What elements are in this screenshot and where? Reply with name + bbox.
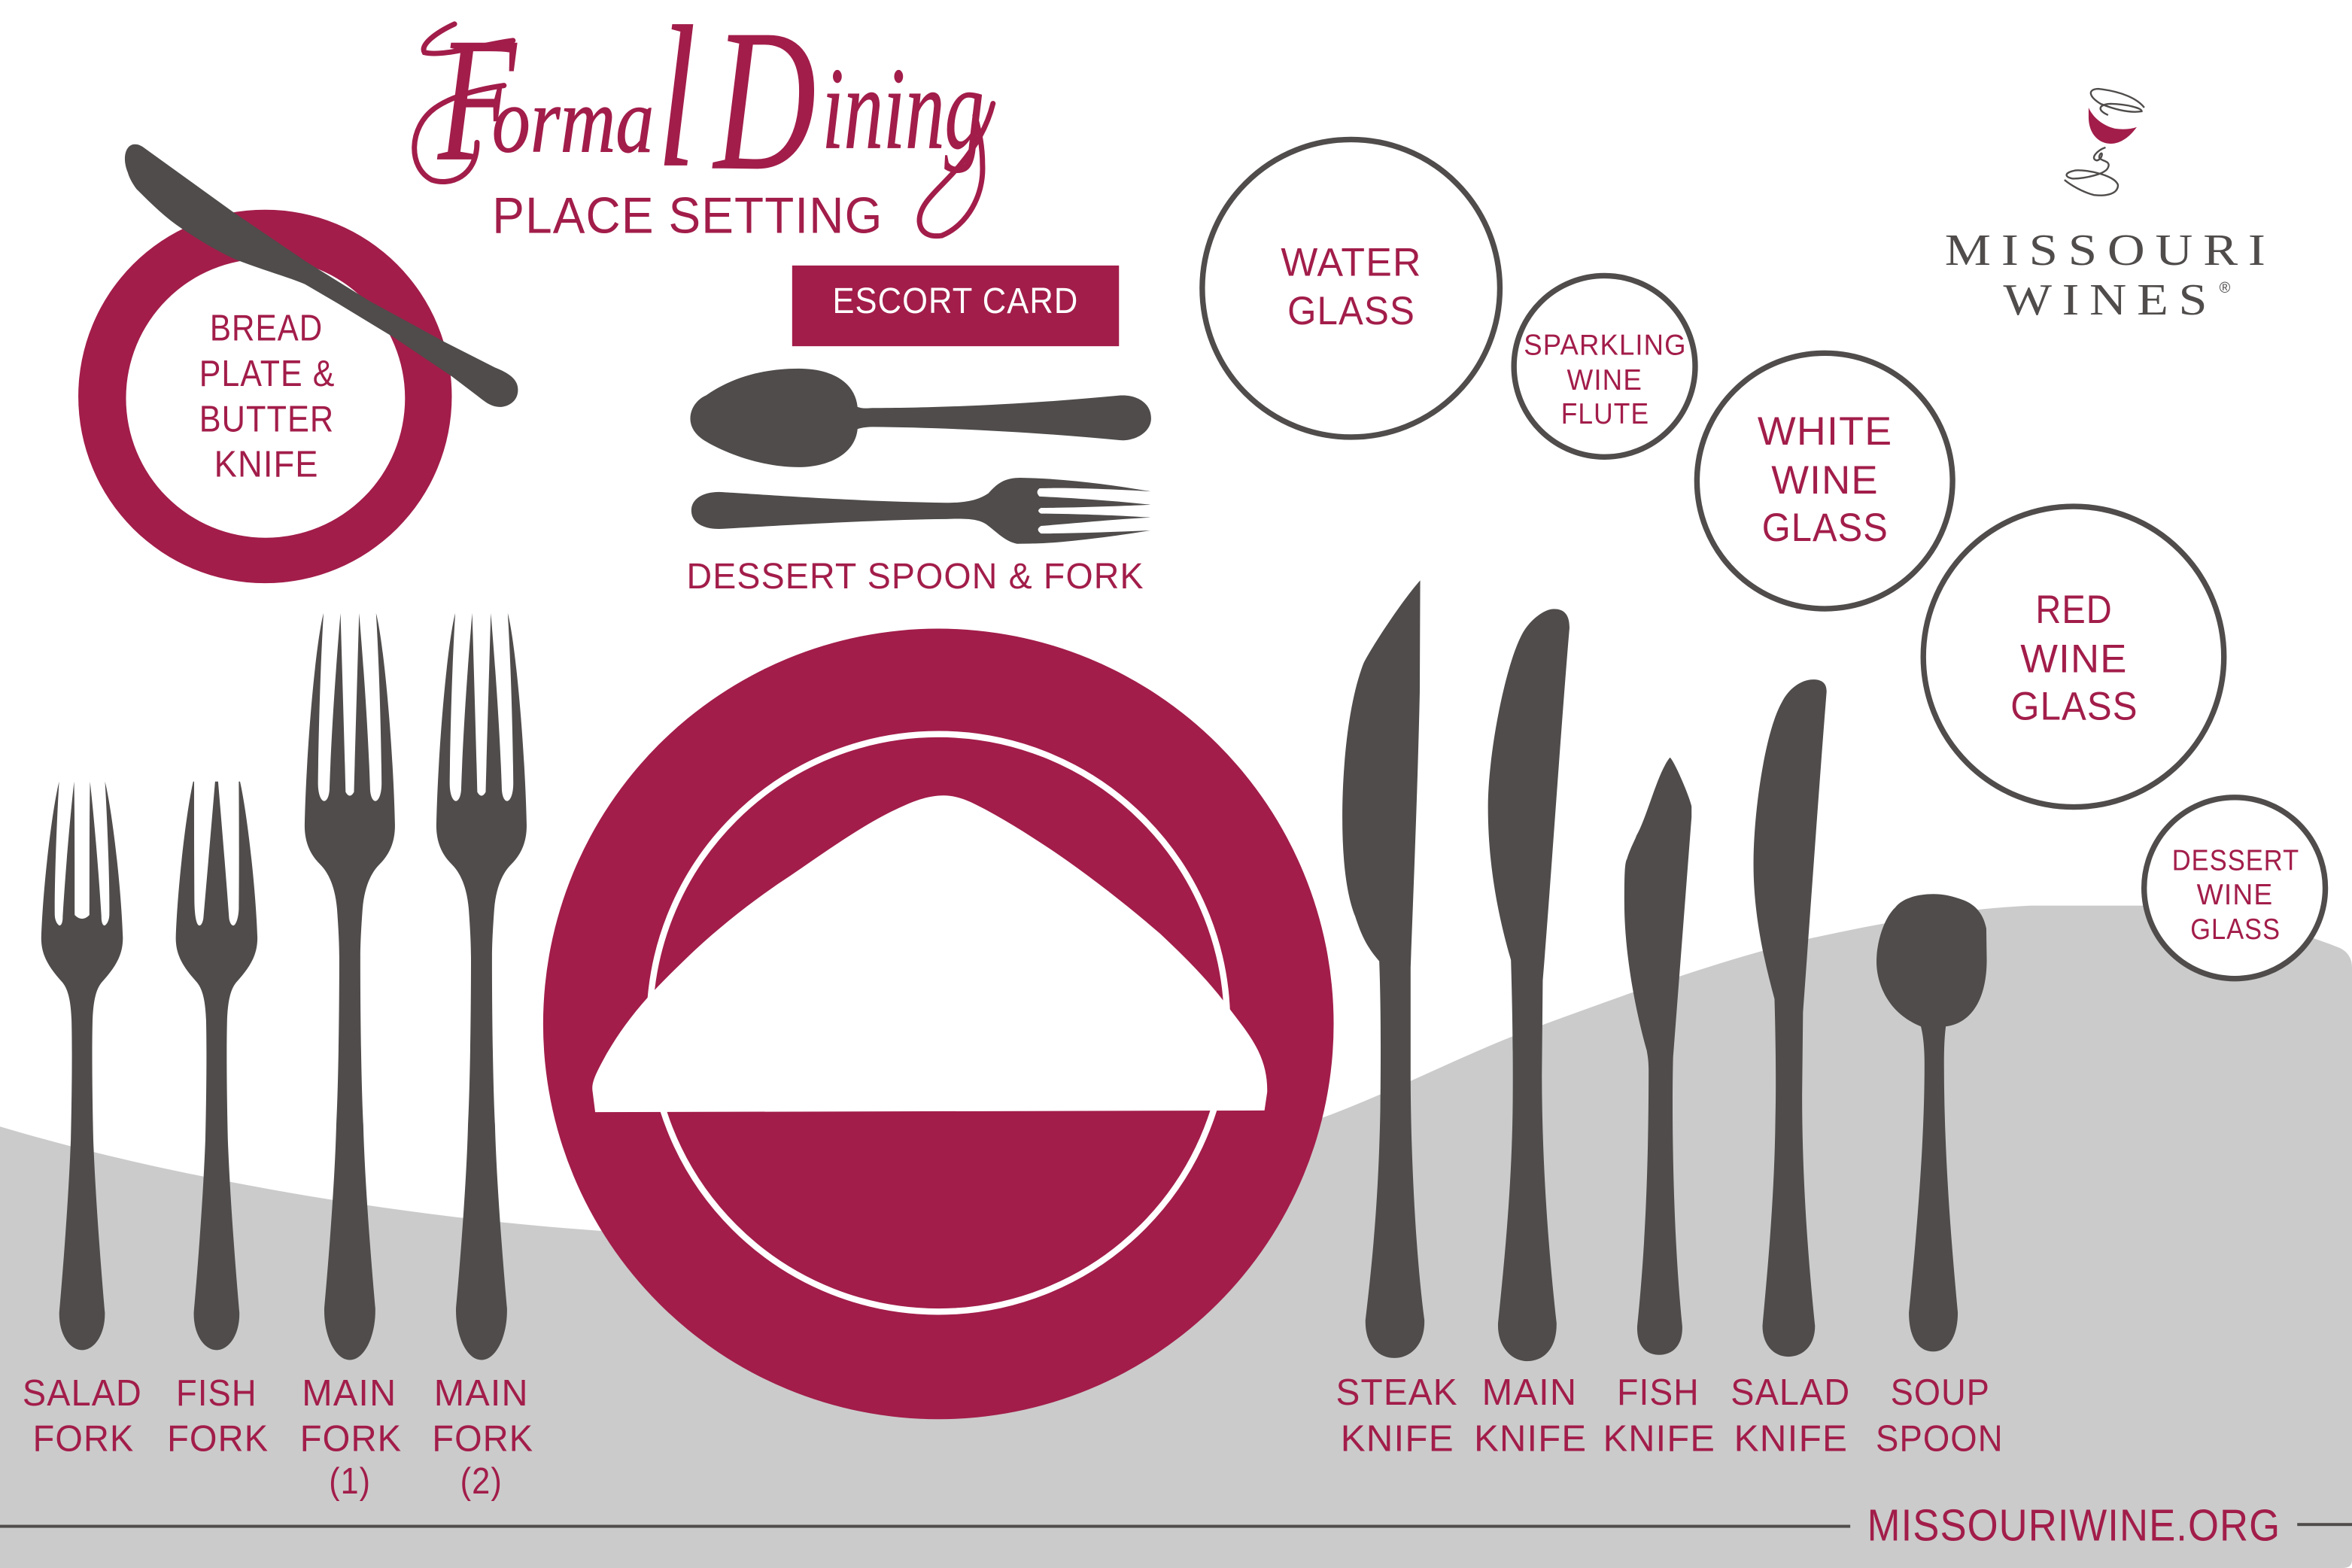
logo: Missouri Wines: MISSOURI xyxy=(1945,225,2276,275)
bread plate label xyxy=(199,308,335,485)
footer rule xyxy=(0,1523,2352,1528)
fork labels: FORK xyxy=(300,1418,402,1459)
icon: main fork 2 xyxy=(436,613,527,1360)
logo: Missouri Wines xyxy=(1945,89,2276,324)
sparkling wine flute: SPARKLING xyxy=(1524,329,1687,361)
knife and spoon labels: STEAK xyxy=(1336,1372,1458,1413)
subtitle: PLACE SETTING xyxy=(492,188,883,245)
knife and spoon labels: KNIFE xyxy=(1341,1418,1454,1459)
knife and spoon labels: KNIFE xyxy=(1603,1418,1715,1459)
escort card: ESCORT CARD xyxy=(832,281,1078,321)
fork labels: FORK xyxy=(33,1418,134,1459)
title: Formal Dining: ining xyxy=(822,43,984,173)
icon: steak knife xyxy=(1342,580,1424,1358)
red wine glass: RED xyxy=(2035,588,2113,632)
water glass xyxy=(1202,139,1500,437)
knife and spoon labels: KNIFE xyxy=(1734,1418,1848,1459)
fork labels: SALAD xyxy=(23,1373,142,1414)
icon: wine glass xyxy=(2065,89,2144,196)
bread plate label: BUTTER xyxy=(199,399,334,439)
fork labels: MAIN xyxy=(434,1373,529,1414)
sparkling wine flute: FLUTE xyxy=(1561,398,1649,430)
water glass: GLASS xyxy=(1287,289,1415,333)
knife and spoon labels: SALAD xyxy=(1731,1372,1850,1413)
fork labels: MAIN xyxy=(302,1373,397,1414)
icon: dessert fork xyxy=(691,478,1150,544)
dessert spoon and fork label: DESSERT SPOON & FORK xyxy=(686,557,1144,597)
fork labels: FORK xyxy=(167,1418,269,1459)
icon: fish fork xyxy=(176,782,257,1350)
folded napkin xyxy=(592,795,1267,1112)
panel: bread plate and butter knife xyxy=(78,144,518,583)
logo: Missouri Wines: WINES xyxy=(2003,275,2217,324)
bread plate label: BREAD xyxy=(210,308,323,349)
logo: Missouri Wines: ® xyxy=(2220,280,2231,296)
red wine glass xyxy=(1923,506,2224,807)
knife and spoon labels: SOUP xyxy=(1891,1372,1990,1413)
sparkling wine flute xyxy=(1514,275,1695,457)
dessert wine glass xyxy=(2144,798,2326,979)
fork labels xyxy=(23,1373,533,1502)
dessert wine glass: WINE xyxy=(2197,879,2273,911)
bread plate label: KNIFE xyxy=(214,444,319,485)
fork labels: FORK xyxy=(432,1418,533,1459)
grey table wave background xyxy=(0,906,2352,1568)
white wine glass: WINE xyxy=(1771,458,1879,503)
icon: salad fork xyxy=(41,782,123,1350)
knife and spoon labels: KNIFE xyxy=(1474,1418,1587,1459)
knife and spoon labels: SPOON xyxy=(1876,1418,2004,1459)
sparkling wine flute: WINE xyxy=(1567,364,1642,397)
title: Formal Dining: orma xyxy=(492,68,654,172)
fork labels: FISH xyxy=(176,1373,257,1414)
dessert wine glass: DESSERT xyxy=(2172,845,2299,877)
fork labels: (2) xyxy=(460,1461,503,1502)
footer website: MISSOURIWINE.ORG xyxy=(1867,1500,2281,1550)
icon: salad knife xyxy=(1754,679,1827,1357)
knife and spoon labels xyxy=(1336,1372,2004,1459)
red wine glass: GLASS xyxy=(2010,685,2138,729)
white wine glass: WHITE xyxy=(1758,409,1892,454)
escort card xyxy=(792,266,1119,346)
water glass: WATER xyxy=(1281,241,1422,285)
icon: dessert spoon xyxy=(690,369,1151,467)
title: Formal Dining: F xyxy=(437,1,517,197)
white wine glass: GLASS xyxy=(1762,506,1889,550)
dessert wine glass: GLASS xyxy=(2190,913,2281,946)
title: Formal Dining xyxy=(415,0,993,236)
panel: main plate with napkin xyxy=(543,629,1334,1419)
knife and spoon labels: FISH xyxy=(1617,1372,1700,1413)
knife and spoon labels: MAIN xyxy=(1482,1372,1577,1413)
white wine glass xyxy=(1697,353,1952,609)
icon: fish knife xyxy=(1624,758,1691,1355)
icon: soup spoon xyxy=(1876,894,1987,1351)
icon: main fork 1 xyxy=(305,613,395,1360)
icon: main knife xyxy=(1488,609,1570,1361)
fork labels: (1) xyxy=(329,1461,371,1502)
red wine glass: WINE xyxy=(2020,637,2128,682)
icon: butter knife xyxy=(125,144,518,407)
bread plate label: PLATE & xyxy=(199,354,335,394)
